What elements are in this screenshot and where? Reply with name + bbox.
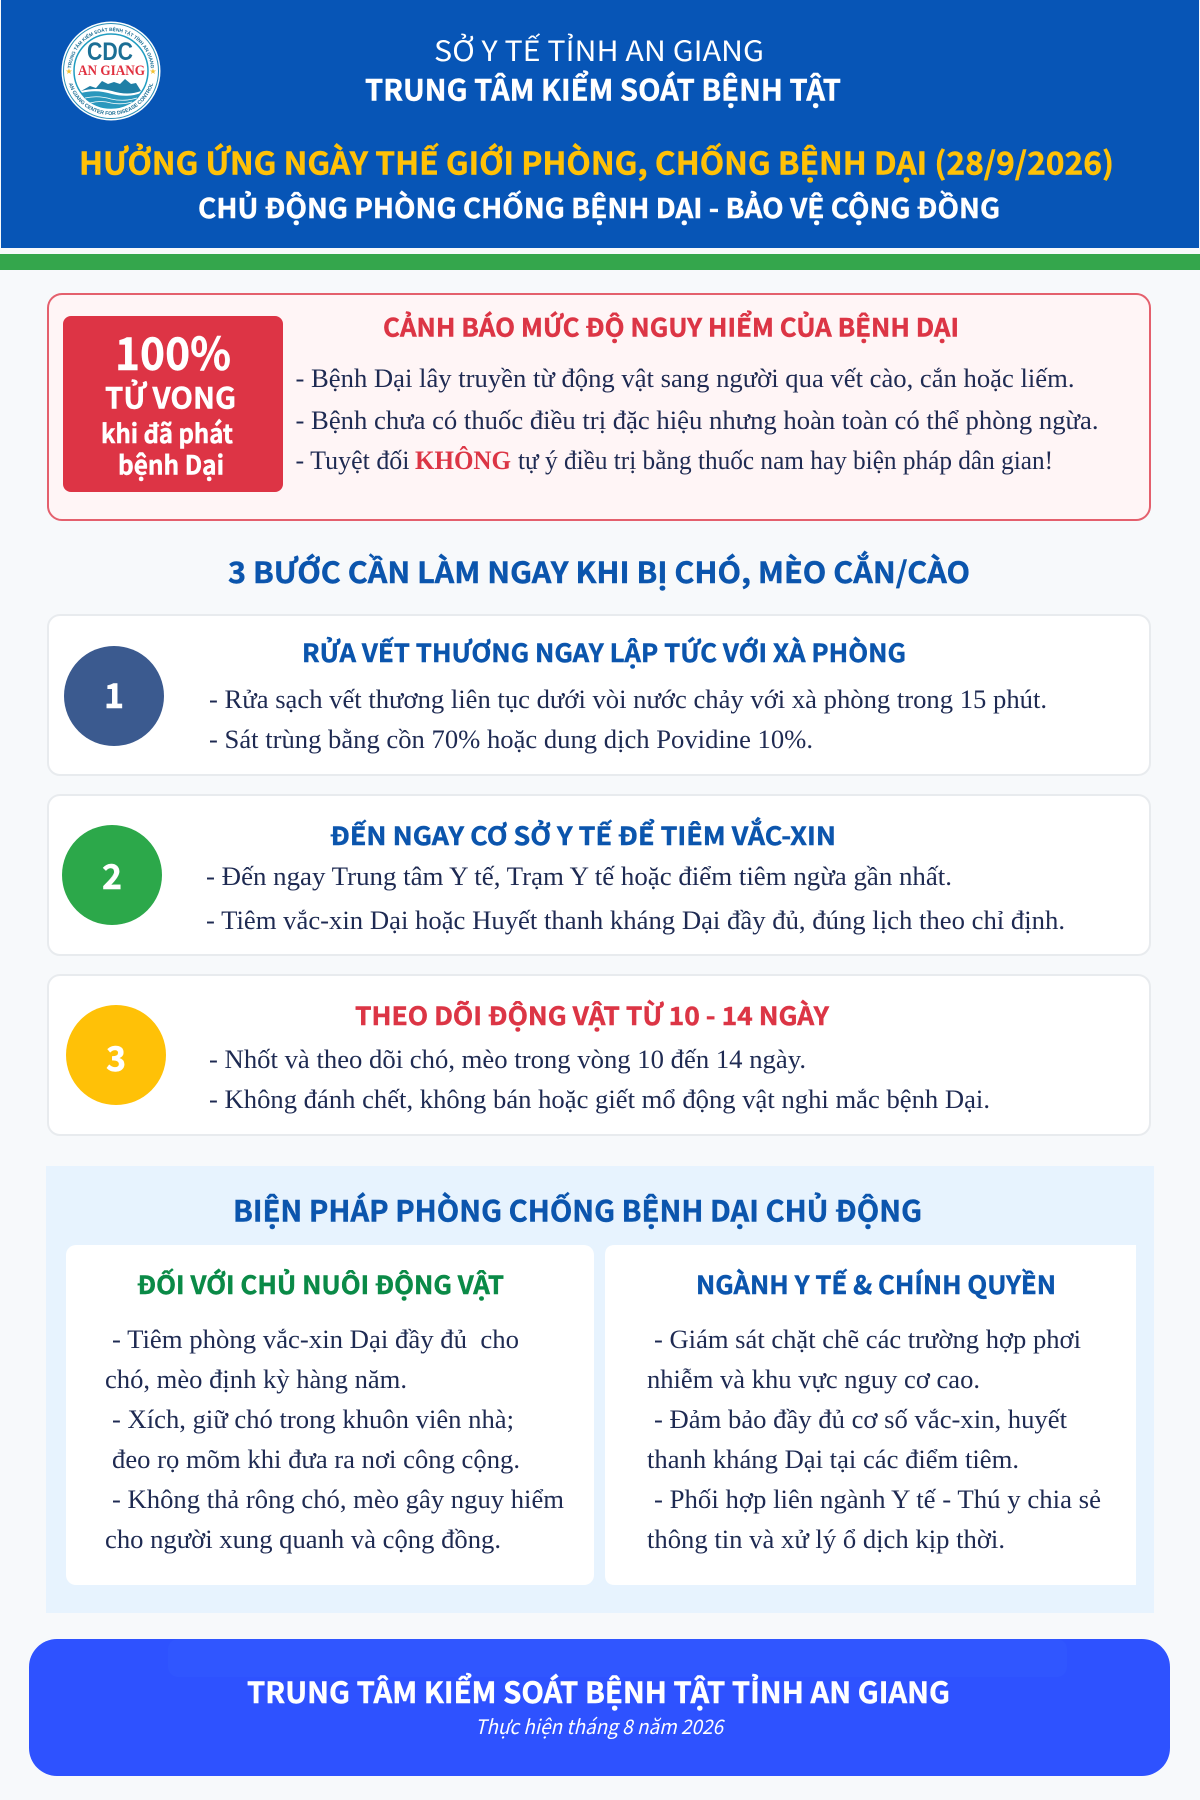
- warning text: tự ý điều trị bằng thuốc nam hay biện pháp dân gian!: [518, 445, 1053, 475]
- panel: proactive prevention: [46, 1166, 1154, 1613]
- section heading: 3 steps: 3 BƯỚC CẦN LÀM NGAY KHI BỊ CHÓ, MÈO CẮN/CÀO: [228, 550, 970, 592]
- health sector text: [647, 1324, 1101, 1554]
- warning text: - Bệnh chưa có thuốc điều trị đặc hiệu nhưng hoàn toàn có thể phòng ngừa.: [296, 405, 1098, 435]
- health sector heading: NGÀNH Y TẾ & CHÍNH QUYỀN: [696, 1266, 1056, 1302]
- warning text: [296, 363, 1098, 475]
- step 3 number badge: 3: [106, 1032, 126, 1081]
- warning text: KHÔNG: [415, 445, 511, 475]
- step 1 number badge: [64, 646, 164, 746]
- owners text: chó, mèo định kỳ hàng năm.: [105, 1364, 407, 1394]
- warning text: - Tuyệt đối: [296, 445, 410, 475]
- owners text: [105, 1324, 564, 1554]
- step 2 text: - Tiêm vắc-xin Dại hoặc Huyết thanh kháng Dại đầy đủ, đúng lịch theo chỉ định.: [206, 905, 1065, 935]
- health sector text: - Giám sát chặt chẽ các trường hợp phơi: [654, 1324, 1081, 1354]
- logo: CDC An Giang: CDC: [87, 38, 133, 66]
- card: health sector and government: [605, 1245, 1136, 1585]
- step 2 text: - Đến ngay Trung tâm Y tế, Trạm Y tế hoặc điểm tiêm ngừa gần nhất.: [206, 861, 952, 891]
- step 1 text: - Rửa sạch vết thương liên tục dưới vòi nước chảy với xà phòng trong 15 phút.: [209, 684, 1047, 714]
- logo: CDC An Giang: AN GIANG: [78, 63, 145, 79]
- step 3 heading: THEO DÕI ĐỘNG VẬT TỪ 10 - 14 NGÀY: [355, 997, 830, 1033]
- step 1 text: - Sát trùng bằng cồn 70% hoặc dung dịch Povidine 10%.: [209, 724, 813, 754]
- step 2 number badge: 2: [102, 850, 122, 899]
- owners text: - Xích, giữ chó trong khuôn viên nhà;: [112, 1404, 514, 1434]
- owners heading: ĐỐI VỚI CHỦ NUÔI ĐỘNG VẬT: [137, 1266, 504, 1302]
- warning text: - Bệnh Dại lây truyền từ động vật sang người qua vết cào, cắn hoặc liếm.: [296, 363, 1074, 393]
- step 3 text: [209, 1044, 990, 1114]
- footer organisation name: TRUNG TÂM KIỂM SOÁT BỆNH TẬT TỈNH AN GIANG: [247, 1670, 950, 1712]
- health sector text: nhiễm và khu vực nguy cơ cao.: [647, 1364, 980, 1394]
- red badge: 100% mortality: bệnh Dại: [118, 446, 224, 482]
- prevention heading: BIỆN PHÁP PHÒNG CHỐNG BỆNH DẠI CHỦ ĐỘNG: [233, 1188, 922, 1230]
- main title: HƯỞNG ỨNG NGÀY THẾ GIỚI PHÒNG, CHỐNG BỆNH DẠI (28/9/2026): [79, 138, 1114, 184]
- panel: danger warning: [48, 294, 1150, 520]
- logo: CDC An Giang: ★: [65, 67, 73, 76]
- step 1 text: [209, 684, 1047, 754]
- warning heading: CẢNH BÁO MỨC ĐỘ NGUY HIỂM CỦA BỆNH DẠI: [383, 308, 959, 344]
- step 1 number badge: 1: [104, 669, 124, 718]
- header band: [1, 0, 1199, 248]
- logo: CDC An Giang: [62, 22, 160, 120]
- owners text: cho người xung quanh và cộng đồng.: [105, 1524, 501, 1554]
- logo: CDC An Giang: AN GIANG CENTER FOR DISEASE CONTROL: [68, 84, 154, 116]
- footer: [29, 1639, 1170, 1776]
- logo: CDC An Giang: TRUNG TÂM KIỂM SOÁT BỆNH TẬT TỈNH AN GIANG: [68, 26, 154, 68]
- step 3 text: - Không đánh chết, không bán hoặc giết mổ động vật nghi mắc bệnh Dại.: [209, 1084, 990, 1114]
- organisation line 1: SỞ Y TẾ TỈNH AN GIANG: [434, 30, 764, 70]
- red badge: 100% mortality: 100%: [115, 318, 231, 383]
- owners text: - Không thả rông chó, mèo gây nguy hiểm: [112, 1484, 564, 1514]
- red badge: 100% mortality: khi đã phát: [101, 414, 233, 451]
- red badge: 100% mortality: TỬ VONG: [105, 376, 236, 418]
- health sector text: - Đảm bảo đầy đủ cơ số vắc-xin, huyết: [654, 1404, 1068, 1434]
- panel: step 1: [48, 615, 1150, 775]
- card: animal owners: [66, 1245, 594, 1585]
- step 2 number badge: [62, 825, 162, 925]
- step 3 text: - Nhốt và theo dõi chó, mèo trong vòng 10 đến 14 ngày.: [209, 1044, 806, 1074]
- red badge: 100% mortality: [63, 316, 283, 492]
- health sector text: thông tin và xử lý ổ dịch kịp thời.: [647, 1524, 1005, 1554]
- step 1 heading: RỬA VẾT THƯƠNG NGAY LẬP TỨC VỚI XÀ PHÒNG: [302, 634, 906, 670]
- owners text: - Tiêm phòng vắc-xin Dại đầy đủ cho: [112, 1324, 519, 1354]
- panel: step 3: [48, 975, 1150, 1135]
- logo: CDC An Giang: ★: [149, 67, 157, 76]
- panel: step 2: [48, 795, 1150, 955]
- footer date: Thực hiện tháng 8 năm 2026: [475, 1711, 726, 1740]
- step 3 number badge: [66, 1005, 166, 1105]
- organisation line 2: TRUNG TÂM KIỂM SOÁT BỆNH TẬT: [365, 68, 841, 110]
- owners text: đeo rọ mõm khi đưa ra nơi công cộng.: [112, 1444, 520, 1474]
- step 2 text: [206, 861, 1065, 935]
- step 2 heading: ĐẾN NGAY CƠ SỞ Y TẾ ĐỂ TIÊM VẮC-XIN: [330, 817, 836, 853]
- subtitle: CHỦ ĐỘNG PHÒNG CHỐNG BỆNH DẠI - BẢO VỆ CỘNG ĐỒNG: [198, 187, 1000, 226]
- health sector text: - Phối hợp liên ngành Y tế - Thú y chia sẻ: [654, 1484, 1101, 1514]
- health sector text: thanh kháng Dại tại các điểm tiêm.: [647, 1444, 1019, 1474]
